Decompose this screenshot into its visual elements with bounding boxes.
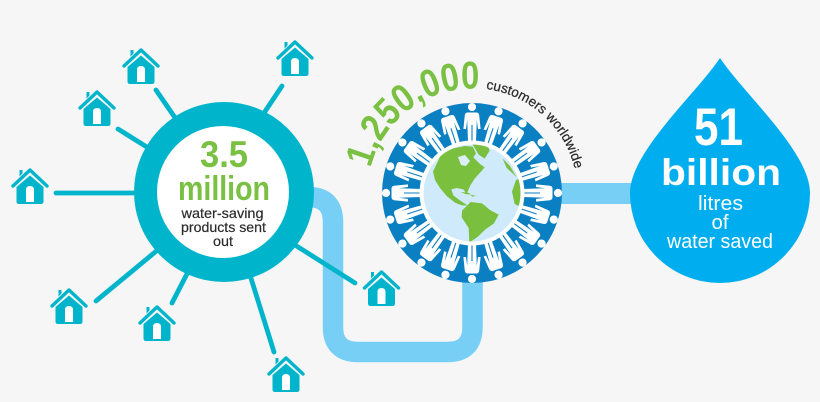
heading: 3.5: 3.5 (200, 134, 248, 175)
heading: 51: 51 (694, 98, 743, 157)
text: litres of water saved (666, 193, 773, 253)
text: water-saving products sent out: water-saving (180, 205, 264, 221)
globe continents (433, 143, 525, 243)
spokes linking homes to products circle (56, 86, 355, 352)
panel: customers globe (382, 103, 562, 283)
text: water-saving products sent out: products sent (181, 219, 266, 235)
text: litres of water saved: of (712, 212, 729, 234)
text: customers worldwide curved: customers worldwide (486, 82, 582, 168)
heading: 1,250,000 curved: 1,250,000 (347, 61, 478, 166)
water pipe from products circle to globe (305, 197, 472, 352)
text: water-saving products sent out: out (213, 233, 233, 249)
house icons (13, 42, 398, 392)
panel: water drop (630, 58, 810, 283)
text: litres of water saved: water saved (666, 231, 773, 253)
heading: million: million (178, 170, 270, 208)
ring of people (382, 103, 562, 283)
heading: billion: billion (661, 152, 781, 193)
panel: products sent out circle (134, 102, 314, 282)
Hudson Bay (458, 155, 470, 166)
text: litres of water saved: litres (698, 193, 743, 215)
water pipe from globe to drop (550, 183, 640, 204)
text: water-saving products sent out (180, 205, 266, 249)
